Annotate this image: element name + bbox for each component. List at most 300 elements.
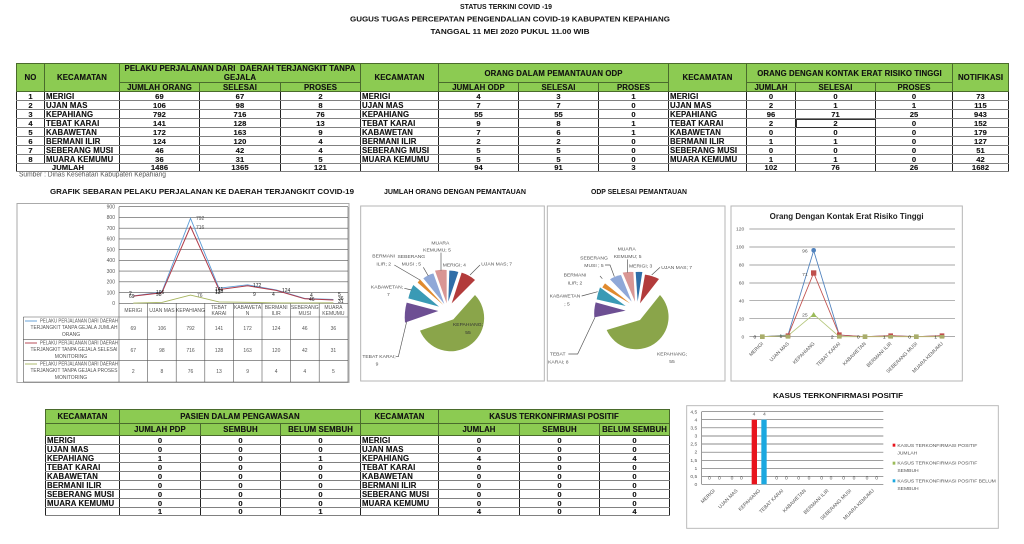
category labels: TEBAT KARAI [758, 488, 785, 515]
y axis labels: 80 [739, 263, 745, 269]
category labels: KEPAHIANG [792, 341, 816, 366]
table: pasien dalam pengawasan: KEPAHIANG [47, 454, 94, 462]
legend: KASUS TERKONFIRMASI POSITIF BELUM [897, 478, 996, 484]
main data table: 0 [769, 146, 773, 154]
y axis labels: 100 [107, 290, 115, 296]
pie labels: KABAWETAN; [371, 285, 403, 291]
legend keys and names [25, 318, 118, 381]
series: jumlah [762, 251, 942, 337]
pie labels: TEBAT KARAI; [362, 354, 396, 360]
data labels: 2 [831, 334, 834, 340]
data table values: 120 [272, 348, 281, 354]
main data table: 120 [234, 136, 246, 146]
table: kasus terkonfirmasi positif: 0 [632, 462, 637, 472]
pie labels [548, 247, 692, 366]
table: kasus terkonfirmasi positif: KECAMATAN [374, 412, 424, 421]
main data table: 0 [631, 154, 636, 164]
data table values: 31 [331, 348, 336, 354]
data labels: 792 [196, 216, 205, 222]
y axis labels: 800 [107, 215, 115, 221]
table: kasus terkonfirmasi positif: 0 [557, 462, 562, 472]
table: pasien dalam pengawasan: 0 [238, 480, 243, 490]
table: kasus terkonfirmasi positif: 0 [557, 444, 562, 454]
heading: confirmed cases chart: KASUS TERKONFIRMASI POSITIF [773, 391, 904, 400]
table: kasus terkonfirmasi positif: MUARA KEMUMU [362, 498, 429, 508]
main data table: SELESAI [818, 82, 853, 92]
data labels: 46 [309, 297, 315, 303]
main data table: SEBERANG MUSI [362, 146, 429, 154]
main data table: 98 [236, 100, 244, 110]
main data table: MUARA KEMUMU [670, 154, 737, 164]
main data table: 36 [155, 154, 164, 164]
panel: pie chart 1 [361, 206, 544, 381]
category labels [124, 305, 345, 317]
bars: Kepahiang [752, 420, 757, 484]
table: pasien dalam pengawasan: 0 [238, 444, 243, 454]
table: pasien dalam pengawasan: BELUM SEMBUH [288, 425, 353, 434]
main data table: 4 [476, 92, 481, 100]
main data table: BERMANI ILIR [362, 136, 417, 146]
pie labels: KEMUMU; 5 [614, 254, 642, 260]
category labels: KEPAHIANG [176, 308, 205, 314]
table: kasus terkonfirmasi positif: 0 [557, 472, 562, 480]
main data table: 3 [556, 92, 561, 100]
legend: KASUS TERKONFIRMASI POSITIF [897, 460, 977, 466]
y axis labels: 4,5 [690, 409, 698, 415]
category labels: KEMUMU [322, 311, 345, 317]
table: pasien dalam pengawasan: MERIGI [47, 436, 75, 444]
pie labels: SEBERANG [580, 255, 608, 261]
category labels: BERMANI ILIR [866, 341, 894, 369]
main data table: 4 [318, 146, 323, 154]
data labels: 2 [129, 291, 132, 297]
main data table: 1 [631, 92, 636, 100]
table: kasus terkonfirmasi positif: 0 [632, 490, 637, 498]
main data table: KECAMATAN [57, 73, 107, 82]
category labels: SEBERANG MUSI [819, 488, 853, 522]
table: pasien dalam pengawasan: 0 [318, 490, 323, 498]
main data table: 25 [910, 110, 918, 118]
data labels: 96 [802, 249, 808, 255]
series: proses [762, 314, 942, 337]
table: kasus terkonfirmasi positif: KASUS TERKONFIRMASI POSITIF [489, 412, 619, 421]
data table values: 124 [272, 326, 281, 332]
main data table: 7 [476, 128, 481, 136]
main data table: PROSES [897, 82, 931, 92]
main data table: 69 [155, 92, 164, 100]
main data table: 2 [556, 136, 561, 146]
data table values: 98 [159, 348, 165, 354]
main data table: 0 [833, 92, 838, 100]
slices [607, 295, 669, 349]
main data table: 716 [234, 110, 246, 118]
main data table: 42 [236, 146, 244, 154]
data labels [708, 412, 878, 482]
main data table: TEBAT KARAI [670, 118, 723, 128]
main data table: 0 [912, 128, 916, 136]
data labels: 0 [718, 476, 721, 482]
table: pasien dalam pengawasan: 0 [158, 444, 162, 454]
category labels: BERMANI ILIR [803, 488, 831, 516]
main data table: MERIGI [46, 92, 74, 100]
legend keys and names: TERJANGKIT TANPA GEJALA SELESAI [30, 347, 118, 353]
main data table: 6 [556, 128, 561, 136]
table: kasus terkonfirmasi positif: 0 [477, 444, 481, 454]
main data table: 5 [28, 128, 33, 136]
data table values: 4 [303, 369, 306, 375]
data labels: 71 [802, 272, 808, 278]
main data table: KABAWETAN [46, 128, 97, 136]
data table values: 46 [302, 326, 308, 332]
y axis labels: 3,5 [690, 425, 698, 431]
legend keys and names: TERJANGKIT TANPA GEJALA JUMLAH [30, 325, 118, 331]
table: pasien dalam pengawasan: 0 [158, 436, 162, 444]
data labels: 31 [338, 299, 344, 305]
pie labels: MUARA [618, 247, 636, 253]
main data table: MERIGI [670, 92, 698, 100]
y axis labels [107, 204, 115, 307]
data table values: 76 [188, 369, 193, 375]
title block: STATUS TERKINI COVID -19 [460, 2, 552, 11]
table: kasus terkonfirmasi positif: 4 [632, 454, 637, 462]
legend: SEMBUH [897, 468, 919, 474]
data labels: 0 [830, 476, 833, 482]
table: kasus terkonfirmasi positif: 0 [632, 480, 637, 490]
table: pasien dalam pengawasan: 0 [318, 472, 323, 480]
main data table: JUMLAH ODP [452, 82, 505, 92]
main data table: 0 [631, 110, 636, 118]
table: kasus terkonfirmasi positif: 0 [477, 462, 481, 472]
table: pasien dalam pengawasan: 0 [318, 462, 323, 472]
y axis labels: 120 [736, 227, 745, 233]
table: pasien dalam pengawasan: MUARA KEMUMU [47, 498, 114, 508]
data labels: 0 [820, 476, 823, 482]
main data table: SEBERANG MUSI [670, 146, 737, 154]
table: kasus terkonfirmasi positif: 0 [632, 436, 637, 444]
table: pasien dalam pengawasan: BERMANI ILIR [47, 480, 101, 490]
data labels: 1 [780, 334, 783, 340]
table: kasus terkonfirmasi positif: 0 [632, 444, 637, 454]
main data table: 124 [153, 136, 166, 146]
data labels: 4 [753, 412, 756, 418]
table: kasus terkonfirmasi positif: BERMANI ILIR [362, 480, 416, 490]
grid lines [749, 229, 955, 319]
leader lines [568, 259, 660, 354]
data table values: 36 [331, 326, 336, 332]
main data table: GEJALA [224, 73, 256, 82]
table: pasien dalam pengawasan: 0 [238, 498, 243, 508]
table: pasien dalam pengawasan: 1 [318, 454, 323, 462]
main data table: 2 [769, 118, 773, 128]
table: pasien dalam pengawasan: 0 [238, 472, 243, 480]
data labels: 0 [731, 476, 734, 482]
main data table: 96 [767, 110, 775, 118]
table: kasus terkonfirmasi positif: SEMBUH [542, 425, 577, 434]
main data table: MERIGI [362, 92, 390, 100]
y axis labels: 100 [736, 245, 745, 251]
table: pasien dalam pengawasan: 0 [238, 454, 243, 462]
data labels: 0 [853, 476, 856, 482]
main data table: 2 [318, 92, 323, 100]
data table values: 163 [243, 348, 252, 354]
data labels: 4 [272, 292, 275, 298]
main data table: 31 [236, 154, 244, 164]
main data table: 71 [831, 110, 840, 118]
main data table: TEBAT KARAI [362, 118, 415, 128]
main data table: KEPAHIANG [362, 110, 409, 118]
main data table: 2 [833, 118, 838, 128]
main data table: 7 [476, 100, 481, 110]
category labels: UJAN MAS [149, 308, 175, 314]
table: pasien dalam pengawasan: KECAMATAN [58, 412, 107, 421]
y axis labels: 20 [739, 316, 745, 322]
series lines [133, 218, 333, 299]
data table values: 716 [186, 348, 195, 354]
data labels: 0 [754, 335, 757, 341]
y axis labels: 700 [107, 226, 115, 232]
main data table: 0 [912, 118, 916, 128]
pie labels: ; 5 [564, 301, 570, 307]
table: kasus terkonfirmasi positif: SEBERANG MUSI [362, 490, 429, 498]
y axis labels: 300 [107, 269, 115, 275]
table: kasus terkonfirmasi positif: MERIGI [362, 436, 390, 444]
main data table: 67 [236, 92, 244, 100]
pie labels: UJAN MAS; 7 [481, 261, 512, 267]
category labels: N [246, 311, 250, 317]
data labels: 36 [338, 296, 344, 302]
pie labels: KEMUMU; 5 [423, 247, 451, 253]
main data table: 0 [631, 146, 636, 154]
category labels: SEBERANG [291, 305, 319, 311]
main data table: BERMANI ILIR [670, 136, 725, 146]
main data table: 5 [556, 154, 561, 164]
data labels: 0 [875, 476, 878, 482]
table: pasien dalam pengawasan: 0 [318, 480, 323, 490]
data labels: 0 [775, 476, 778, 482]
main data table: NO [25, 73, 36, 82]
pie labels: MUARA [431, 240, 450, 246]
main data table: PROSES [304, 82, 337, 92]
data labels: 0 [797, 476, 800, 482]
table: kasus terkonfirmasi positif: 0 [477, 498, 481, 508]
chart title: Orang Dengan Kontak Erat Risiko Tinggi [770, 212, 924, 221]
main data table: 46 [155, 146, 164, 154]
data labels: 124 [282, 288, 291, 294]
main data table: 106 [153, 100, 166, 110]
data labels: 106 [156, 290, 165, 296]
pie labels: BERMANI [564, 273, 586, 279]
category labels: KABAWETAN [842, 341, 868, 367]
table: kasus terkonfirmasi positif: 4 [477, 454, 481, 462]
table: kasus terkonfirmasi positif: 0 [557, 480, 562, 490]
pie labels: ILIR; 2 [376, 262, 391, 268]
pie labels: MERIGI; 4 [443, 263, 466, 269]
y axis labels: 4 [695, 417, 698, 423]
main data table: BERMANI ILIR [46, 136, 100, 146]
data table values: 69 [131, 326, 136, 332]
table: kasus terkonfirmasi positif: KEPAHIANG [362, 454, 409, 462]
main data table: 0 [912, 92, 916, 100]
data table values: 792 [186, 326, 195, 332]
table: kasus terkonfirmasi positif: 0 [477, 490, 481, 498]
table: kasus terkonfirmasi positif: TEBAT KARAI [362, 462, 415, 472]
main data table: MUARA KEMUMU [46, 154, 113, 164]
table: pasien dalam pengawasan: UJAN MAS [47, 444, 89, 454]
main data table: 1 [28, 92, 33, 100]
main data table: UJAN MAS [670, 100, 712, 110]
legend keys and names: MONITORING [55, 354, 87, 360]
y axis labels: 2,5 [690, 442, 698, 448]
pie labels: KARAI; 8 [548, 360, 569, 366]
main data table: 152 [974, 118, 987, 128]
main data table: 5 [318, 154, 323, 164]
y axis labels: 2 [695, 450, 698, 456]
y axis labels: 200 [107, 280, 115, 286]
main data table: PELAKU PERJALANAN DARI DAERAH TERJANGKIT TANPA [125, 64, 356, 73]
y axis labels: 1,5 [690, 458, 698, 464]
main data table: 115 [974, 100, 987, 110]
category labels: UJAN MAS [769, 341, 791, 363]
y axis labels: 3 [695, 434, 698, 440]
data labels: 25 [802, 313, 808, 319]
table: pasien dalam pengawasan: 0 [318, 498, 323, 508]
main data table: 5 [476, 146, 481, 154]
main data table: 73 [976, 92, 985, 100]
title block: TANGGAL 11 MEI 2020 PUKUL 11.00 WIB [430, 27, 590, 36]
main data table: 2 [28, 100, 33, 110]
table: kasus terkonfirmasi positif: 0 [632, 472, 637, 480]
main data table: NOTIFIKASI [958, 73, 1003, 82]
category labels: TEBAT [211, 305, 227, 311]
main data table: KECAMATAN [375, 73, 425, 82]
legend keys and names: PELAKU PERJALANAN DARI DAERAH [40, 318, 118, 324]
data labels: 0 [808, 476, 811, 482]
main data table: SELESAI [542, 82, 576, 92]
category labels: ILIR [272, 311, 281, 317]
table: pasien dalam pengawasan: 0 [158, 490, 162, 498]
pie labels: MUSI ; 5 [402, 262, 421, 268]
main data table: ORANG DENGAN KONTAK ERAT RISIKO TINGGI [757, 68, 942, 78]
data labels [754, 249, 937, 341]
table: pasien dalam pengawasan: 0 [238, 436, 243, 444]
y axis labels: 0,5 [690, 474, 698, 480]
data labels: 9 [253, 292, 256, 298]
main data table: KABAWETAN [670, 128, 721, 136]
legend [893, 443, 996, 492]
main data table: 127 [974, 136, 987, 146]
main data table: UJAN MAS [46, 100, 88, 110]
data table values: 67 [131, 348, 136, 354]
category labels: BERMANI [265, 305, 288, 311]
y axis labels: 400 [107, 258, 115, 264]
main data table: 1 [833, 154, 838, 164]
main data table: 8 [556, 118, 561, 128]
data labels: 141 [215, 287, 224, 293]
data table values: 5 [332, 369, 335, 375]
table: kasus terkonfirmasi positif [360, 409, 670, 516]
main data table: 55 [474, 110, 483, 118]
table: pasien dalam pengawasan: JUMLAH PDP [134, 425, 186, 434]
data labels: 0 [908, 335, 911, 341]
category labels: KABAWETA [234, 305, 262, 311]
main data table: 1 [631, 118, 636, 128]
data table values: 106 [158, 326, 166, 332]
legend keys and names: PELAKU PERJALANAN DARI DAERAH [40, 340, 118, 346]
main data table: 1 [833, 100, 838, 110]
main data table: 1 [769, 154, 773, 164]
main data table: 6 [28, 136, 33, 146]
category labels: MERIGI [748, 341, 765, 358]
panel: close contact line chart [731, 206, 962, 381]
main data table: 4 [318, 136, 323, 146]
pie labels: 55 [465, 330, 471, 336]
category labels: MUARA KEMUMU [911, 341, 945, 375]
main data table: 0 [769, 92, 773, 100]
main data table: TEBAT KARAI [46, 118, 99, 128]
panel: travellers line chart [17, 204, 349, 382]
main data table: MUARA KEMUMU [362, 154, 429, 164]
y axis labels: 900 [107, 204, 115, 210]
main data table: PROSES [617, 82, 650, 92]
data labels: 172 [253, 283, 262, 289]
data labels: 4 [763, 412, 766, 418]
table: pasien dalam pengawasan: PASIEN DALAM PENGAWASAN [180, 412, 300, 421]
data table values [131, 326, 336, 375]
main data table: 8 [318, 100, 323, 110]
main data table: 9 [476, 118, 481, 128]
pie labels: 7 [387, 292, 390, 298]
main data table: 792 [153, 110, 166, 118]
table: pasien dalam pengawasan: KABAWETAN [47, 472, 98, 480]
pie labels: 55 [669, 359, 675, 365]
leader lines [394, 253, 480, 357]
data labels: 716 [196, 225, 205, 231]
data labels: 128 [215, 289, 224, 295]
category labels: MERIGI [700, 488, 717, 505]
y axis labels [736, 227, 745, 340]
main data table: KABAWETAN [362, 128, 413, 136]
y axis labels: 500 [107, 248, 115, 254]
markers [811, 248, 816, 253]
data labels: 0 [842, 476, 845, 482]
legend keys and names: TERJANGKIT TANPA GEJALA PROSES [30, 368, 118, 374]
data table values: 9 [246, 369, 249, 375]
data labels: 5 [338, 292, 341, 298]
pie labels: MERIGI; 3 [629, 264, 653, 270]
main data table: 0 [631, 100, 636, 110]
data labels: 0 [708, 476, 711, 482]
table: kasus terkonfirmasi positif: 0 [557, 490, 562, 498]
table: pasien dalam pengawasan: SEMBUH [223, 425, 258, 434]
table: kasus terkonfirmasi positif: 0 [477, 480, 481, 490]
data labels [129, 216, 344, 305]
title block [350, 2, 670, 36]
pie labels: BERMANI [372, 254, 395, 260]
category labels: MUARA [324, 305, 343, 311]
main data table: 42 [976, 154, 985, 164]
main data table: ORANG DALAM PEMANTAUAN ODP [485, 68, 623, 78]
table: kasus terkonfirmasi positif: UJAN MAS [362, 444, 404, 454]
main data table: JUMLAH [754, 82, 788, 92]
main data table: 179 [974, 128, 987, 136]
title block: GUGUS TUGAS PERCEPATAN PENGENDALIAN COVID-19 KABUPATEN KEPAHIANG [350, 14, 670, 24]
data table values: 42 [302, 348, 308, 354]
data table values: 2 [132, 369, 135, 375]
data labels: 0 [785, 476, 788, 482]
main data table: 163 [234, 128, 246, 136]
pie labels: KABAWETAN [550, 294, 581, 300]
table: pasien dalam pengawasan: TEBAT KARAI [47, 462, 100, 472]
